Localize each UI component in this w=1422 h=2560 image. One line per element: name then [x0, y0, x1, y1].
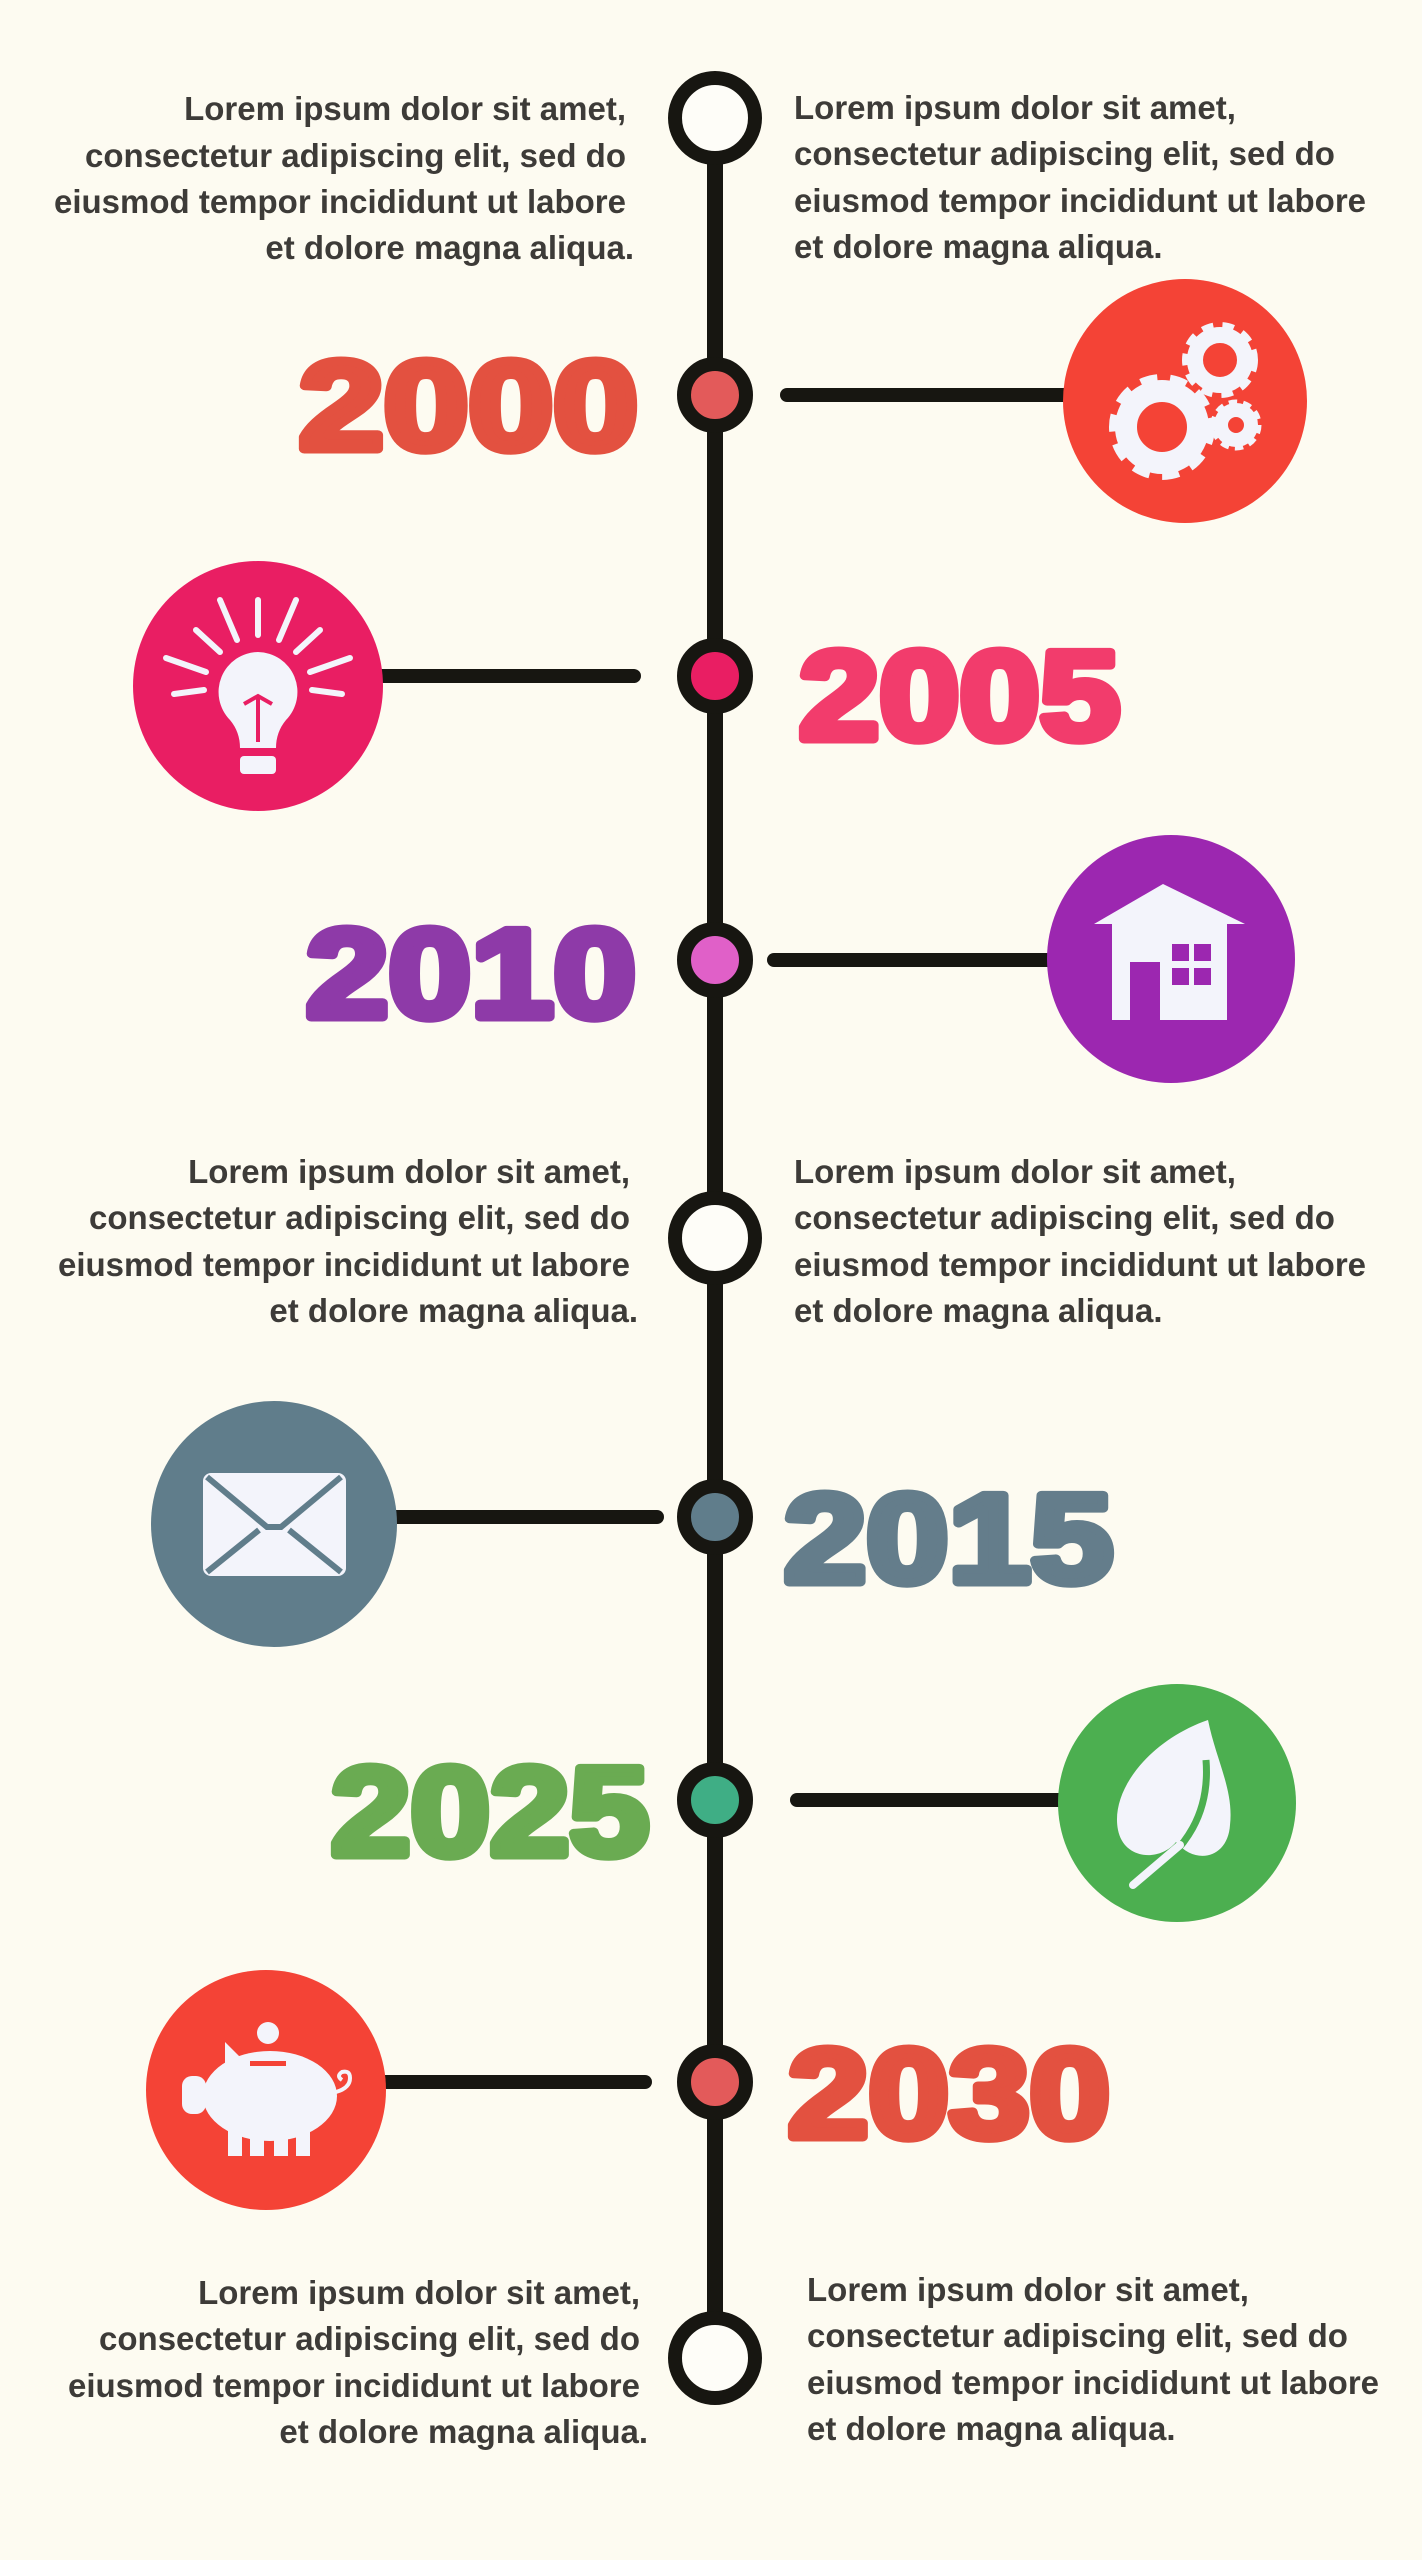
text block: bottom right: Lorem ipsum dolor sit amet, — [807, 2271, 1249, 2308]
year 2005: 2005 — [799, 625, 1120, 766]
text block: top left: consectetur adipiscing elit, sed do — [85, 137, 626, 174]
text block: middle right: consectetur adipiscing elit, sed do — [794, 1199, 1335, 1236]
text block: bottom right: eiusmod tempor incididunt ut labore — [807, 2364, 1379, 2401]
icon: house — [1047, 835, 1295, 1083]
text block: bottom left: consectetur adipiscing elit, sed do — [99, 2320, 640, 2357]
text block: middle right: et dolore magna aliqua. — [794, 1292, 1163, 1329]
connector: 2010 — [774, 953, 1050, 967]
text block: middle left: et dolore magna aliqua. — [269, 1292, 638, 1329]
icon: gears — [1063, 279, 1307, 523]
text block: top right: Lorem ipsum dolor sit amet, — [794, 89, 1236, 126]
text block: top right: et dolore magna aliqua. — [794, 228, 1163, 265]
text block: top right: consectetur adipiscing elit, sed do — [794, 135, 1335, 172]
text block: bottom right — [807, 2271, 1379, 2447]
connector: 2030 — [380, 2075, 645, 2089]
connector: 2025 — [797, 1793, 1065, 1807]
text block: bottom left: eiusmod tempor incididunt ut labore — [68, 2367, 640, 2404]
text block: top left: eiusmod tempor incididunt ut labore — [54, 183, 626, 220]
text block: middle left: Lorem ipsum dolor sit amet, — [188, 1153, 630, 1190]
year 2030: 2030 — [788, 2023, 1110, 2164]
open node top — [675, 78, 755, 158]
icon: lightbulb — [133, 561, 383, 811]
icon: leaf — [1058, 1684, 1296, 1922]
text block: bottom right: consectetur adipiscing elit, sed do — [807, 2317, 1348, 2354]
year 2000: 2000 — [299, 335, 638, 476]
text block: top left: et dolore magna aliqua. — [265, 229, 634, 266]
dot 2015 — [684, 1486, 746, 1548]
text block: middle left: consectetur adipiscing elit, sed do — [89, 1199, 630, 1236]
text block: top right: eiusmod tempor incididunt ut labore — [794, 182, 1366, 219]
text block: middle left — [58, 1153, 638, 1329]
timeline line — [707, 118, 723, 2358]
text block: top left — [54, 90, 634, 266]
text block: bottom left: et dolore magna aliqua. — [279, 2413, 648, 2450]
connector: 2000 — [787, 388, 1075, 402]
text block: middle right: eiusmod tempor incididunt ut labore — [794, 1246, 1366, 1283]
dot 2005 — [684, 645, 746, 707]
year 2025: 2025 — [331, 1741, 649, 1882]
year 2015: 2015 — [784, 1468, 1113, 1609]
connector: 2015 — [390, 1510, 657, 1524]
text block: top left: Lorem ipsum dolor sit amet, — [184, 90, 626, 127]
text block: middle left: eiusmod tempor incididunt ut labore — [58, 1246, 630, 1283]
open node bottom — [675, 2318, 755, 2398]
year 2010: 2010 — [306, 903, 636, 1044]
text block: middle right: Lorem ipsum dolor sit amet, — [794, 1153, 1236, 1190]
text block: bottom left: Lorem ipsum dolor sit amet, — [198, 2274, 640, 2311]
open node middle — [675, 1198, 755, 1278]
text block: top right — [794, 89, 1366, 265]
dot 2010 — [684, 929, 746, 991]
icon: envelope — [151, 1401, 397, 1647]
dot 2030 — [684, 2051, 746, 2113]
text block: bottom left — [68, 2274, 648, 2450]
connector: 2005 — [380, 669, 634, 683]
dot 2000 — [684, 364, 746, 426]
dot 2025 — [684, 1769, 746, 1831]
text block: middle right — [794, 1153, 1366, 1329]
text block: bottom right: et dolore magna aliqua. — [807, 2410, 1176, 2447]
icon: piggy bank — [146, 1970, 386, 2210]
